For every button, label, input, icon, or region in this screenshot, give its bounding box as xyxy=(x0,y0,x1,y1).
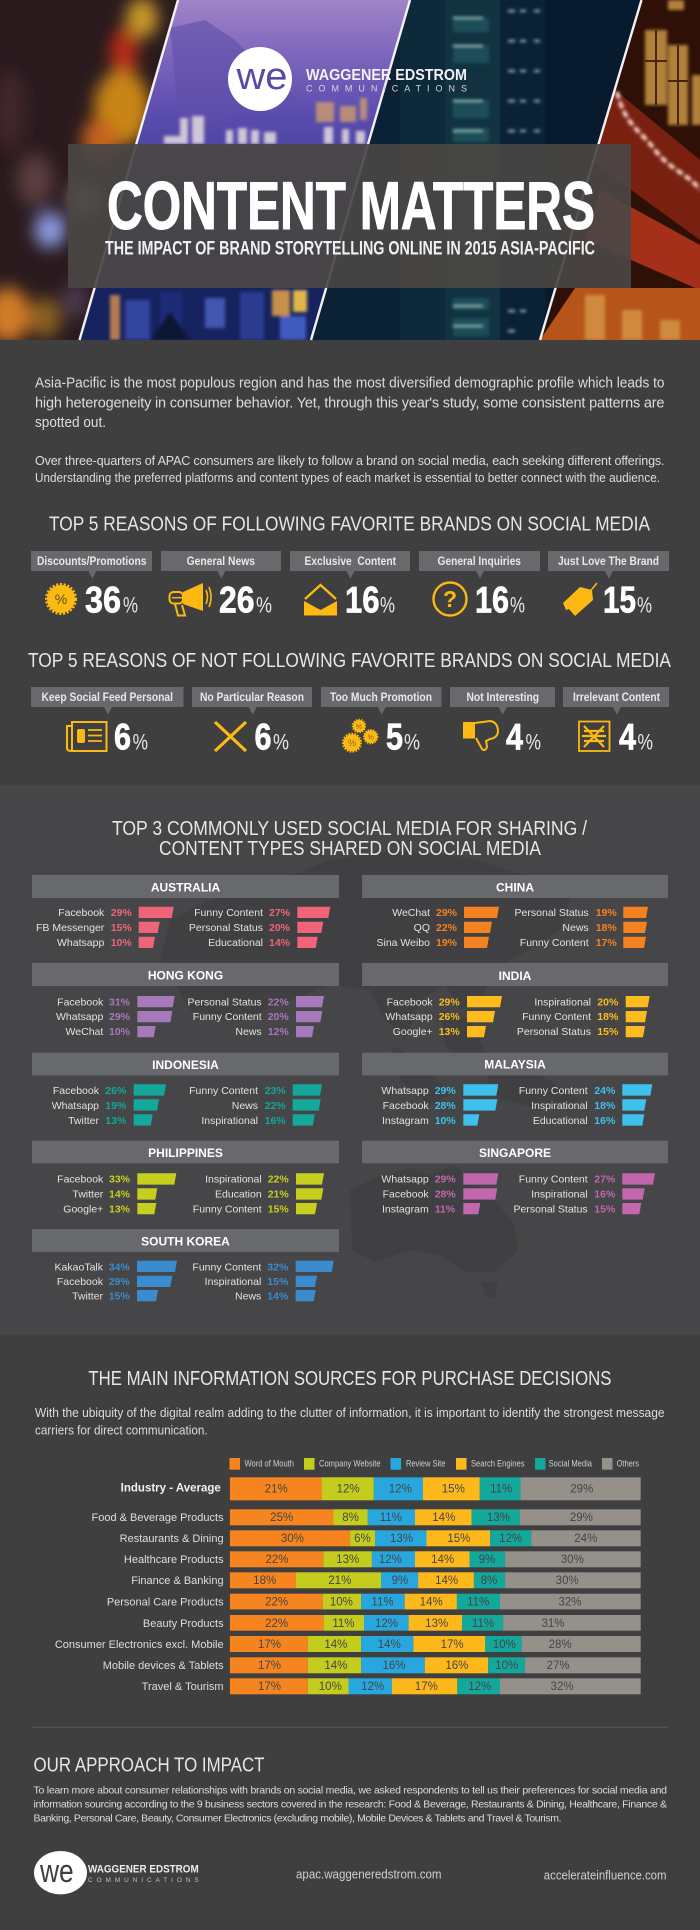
row: personal care: 14% xyxy=(420,1596,443,1608)
reason: irrelevant content xyxy=(563,687,669,757)
row: mobile devices: 16% xyxy=(445,1660,468,1672)
reason: no particular reason: No Particular Reason xyxy=(200,692,304,704)
panel: Hong Kong: 22% xyxy=(268,996,289,1008)
panel: Hong Kong: Personal Status xyxy=(188,996,262,1008)
row: healthcare: 30% xyxy=(561,1554,584,1566)
panel: China: 22% xyxy=(436,922,458,934)
panel: Indonesia: 26% xyxy=(105,1085,127,1097)
row: finance: 8% xyxy=(481,1575,497,1587)
text block: approach: information sourcing according to the 9 business sectors covered in the research: Food & Beverage, Restaurants & Dining, Healthcare, Finance & xyxy=(34,1798,667,1810)
row: healthcare xyxy=(124,1551,641,1567)
text block: information sources intro: carriers for direct communication. xyxy=(35,1422,208,1437)
panel: India: Personal Status xyxy=(517,1026,591,1038)
row: food and beverage: 13% xyxy=(487,1512,510,1524)
reason: just love the brand xyxy=(548,551,669,621)
row: mobile devices xyxy=(103,1657,641,1673)
chart legend xyxy=(230,1458,639,1470)
panel: Singapore: SINGAPORE xyxy=(479,1146,551,1160)
chart legend: Review Site xyxy=(406,1459,445,1470)
panel: India: 20% xyxy=(597,996,619,1008)
reason: exclusive content xyxy=(290,551,410,621)
row: personal care: Personal Care Products xyxy=(107,1596,224,1608)
panel: Malaysia: Educational xyxy=(533,1115,588,1127)
panel: China: Funny Content xyxy=(520,937,589,949)
row: restaurants: 12% xyxy=(499,1533,522,1545)
row: restaurants: 6% xyxy=(354,1533,371,1545)
reason: not interesting: Not Interesting xyxy=(466,692,539,704)
row: consumer electronics: 14% xyxy=(324,1639,347,1651)
panel: Malaysia: Whatsapp xyxy=(381,1085,429,1097)
row: industry average: 29% xyxy=(570,1484,593,1496)
text block: information sources intro: With the ubiquity of the digital realm adding to the clutter of information, it is important to identify the strongest message xyxy=(35,1405,664,1420)
row: travel: 32% xyxy=(551,1681,574,1693)
panel: Hong Kong: WeChat xyxy=(66,1026,103,1038)
panel: Hong Kong: Whatsapp xyxy=(56,1011,103,1023)
panel: Singapore: Personal Status xyxy=(514,1204,588,1216)
row: consumer electronics: 17% xyxy=(258,1639,281,1651)
row: consumer electronics: Consumer Electronics excl. Mobile xyxy=(55,1639,224,1651)
reason: too much promotion: % xyxy=(348,738,356,748)
reason: exclusive content: % xyxy=(380,593,395,618)
intro text block: high heterogeneity in consumer behavior. Yet, through this year's study, some consistent patterns are xyxy=(35,396,664,412)
world map silhouette xyxy=(160,850,580,1298)
intro text block: Asia-Pacific is the most populous region and has the most diversified demographic profile which leads to xyxy=(35,376,664,392)
panel: Australia: Personal Status xyxy=(189,922,263,934)
panel: China: Sina Weibo xyxy=(376,937,430,949)
panel: South Korea: News xyxy=(235,1291,261,1303)
panel: Singapore: Instagram xyxy=(382,1204,429,1216)
panel: India: 15% xyxy=(597,1026,619,1038)
panel: Philippines: 33% xyxy=(109,1174,131,1186)
reason: not interesting: 4 xyxy=(506,716,523,757)
row: finance: 30% xyxy=(556,1575,579,1587)
reason: just love the brand: 15 xyxy=(603,580,636,621)
panel: Singapore: Facebook xyxy=(383,1189,429,1201)
panel: China: 19% xyxy=(596,907,617,919)
panel: Singapore: 11% xyxy=(435,1204,456,1216)
row: finance xyxy=(131,1572,641,1588)
row: beauty: 13% xyxy=(425,1618,448,1630)
panel: China: 17% xyxy=(596,937,617,949)
panel: South Korea: 15% xyxy=(109,1291,130,1303)
heading: social media sharing: TOP 3 COMMONLY USED SOCIAL MEDIA FOR SHARING / xyxy=(112,818,587,840)
reason: exclusive content: 16 xyxy=(345,580,380,621)
panel: Singapore xyxy=(362,1141,668,1216)
reason: discounts: Discounts/Promotions xyxy=(37,556,146,568)
reason: too much promotion: % xyxy=(356,724,362,731)
panel: India: Google+ xyxy=(393,1026,433,1038)
footer logo: WAGGENER EDSTROM xyxy=(88,1864,199,1876)
panel: Australia: Funny Content xyxy=(194,907,263,919)
panel: Philippines: PHILIPPINES xyxy=(148,1146,223,1160)
row: travel: Travel & Tourism xyxy=(142,1681,224,1693)
panel: Singapore: Inspirational xyxy=(531,1189,588,1201)
panel: Philippines: Google+ xyxy=(63,1204,103,1216)
reason: keep feed personal: % xyxy=(133,729,148,754)
reason: keep feed personal: Keep Social Feed Personal xyxy=(42,692,173,704)
row: beauty: 11% xyxy=(332,1618,354,1630)
reason: not interesting xyxy=(450,687,555,757)
intro text block: spotted out. xyxy=(35,415,106,431)
row: personal care: 22% xyxy=(265,1596,288,1608)
panel: India: 26% xyxy=(439,1011,460,1023)
panel: Philippines: 14% xyxy=(109,1189,131,1201)
panel: South Korea: 29% xyxy=(109,1276,130,1288)
panel: South Korea: Inspirational xyxy=(205,1276,261,1288)
reason: discounts: % xyxy=(55,591,67,607)
reason: general news: General News xyxy=(187,556,255,568)
row: healthcare: 13% xyxy=(336,1554,359,1566)
row: beauty: Beauty Products xyxy=(143,1618,224,1630)
panel: India: Facebook xyxy=(387,996,433,1008)
row: mobile devices: Mobile devices & Tablets xyxy=(103,1660,224,1672)
row: finance: 18% xyxy=(253,1575,276,1587)
reason: too much promotion: % xyxy=(404,729,420,754)
panel: China: 18% xyxy=(596,922,617,934)
row: industry average: 12% xyxy=(389,1484,412,1496)
panel: India: INDIA xyxy=(499,969,532,983)
row: finance: 9% xyxy=(392,1575,408,1587)
panel: reasons of not following xyxy=(31,687,669,757)
panel: Australia: FB Messenger xyxy=(36,922,105,934)
panel: Philippines: Funny Content xyxy=(193,1204,262,1216)
panel: Australia: 29% xyxy=(111,907,132,919)
row: personal care xyxy=(107,1594,641,1609)
row: beauty: 11% xyxy=(472,1618,494,1630)
reason: general inquiries: ? xyxy=(443,586,457,612)
panel: India xyxy=(362,963,668,1038)
panel: Australia: 20% xyxy=(269,922,291,934)
row: mobile devices: 16% xyxy=(382,1660,406,1672)
intro text block xyxy=(35,376,664,485)
row: travel xyxy=(142,1678,641,1694)
row: food and beverage: 8% xyxy=(342,1512,359,1524)
panel: South Korea: Facebook xyxy=(57,1276,104,1288)
panel: Philippines: Education xyxy=(215,1189,262,1201)
panel: Malaysia: 18% xyxy=(594,1100,616,1112)
panel background: social media by market xyxy=(0,785,700,1335)
reason: irrelevant content: % xyxy=(638,729,653,754)
row: restaurants: 13% xyxy=(390,1533,413,1545)
reason: general news xyxy=(161,551,281,621)
text block: approach: To learn more about consumer relationships with brands on social media, we asked respondents to tell us their preferences for social media and xyxy=(34,1784,667,1796)
panel: Indonesia: Twitter xyxy=(68,1115,100,1127)
row: restaurants: 30% xyxy=(281,1533,304,1545)
panel: South Korea: 34% xyxy=(109,1261,130,1273)
footer url: accelerate influence: accelerateinfluence.com xyxy=(544,1867,666,1882)
panel: China: 29% xyxy=(436,907,458,919)
panel: Indonesia: 22% xyxy=(265,1100,286,1112)
row: restaurants: Restaurants & Dining xyxy=(120,1533,224,1545)
reason: too much promotion: Too Much Promotion xyxy=(330,692,432,704)
row: healthcare: 22% xyxy=(265,1554,289,1566)
panel: China: CHINA xyxy=(496,880,534,894)
reason: just love the brand: Just Love The Brand xyxy=(558,556,659,568)
hero photo collage xyxy=(0,0,700,343)
text block: approach: Banking, Personal Care, Beauty, Consumer Electronics (excluding mobile), Mobile Devices & Tablets and Travel & Tourism. xyxy=(34,1812,562,1824)
row: beauty: 31% xyxy=(541,1618,565,1630)
footer logo xyxy=(34,1851,199,1894)
reason: keep feed personal xyxy=(31,687,184,757)
panel: Australia: Facebook xyxy=(58,907,105,919)
panel: South Korea xyxy=(32,1229,339,1303)
row: beauty xyxy=(143,1615,641,1631)
panel: Malaysia: 16% xyxy=(594,1115,616,1127)
panel: Philippines: Inspirational xyxy=(205,1174,262,1186)
row: finance: 21% xyxy=(328,1575,351,1587)
panel: Indonesia xyxy=(32,1053,339,1127)
reason: general inquiries: % xyxy=(510,593,525,618)
panel: Philippines: Twitter xyxy=(72,1189,104,1201)
reason: discounts xyxy=(31,551,152,621)
reason: just love the brand: % xyxy=(637,593,652,618)
reason: no particular reason: % xyxy=(273,729,289,754)
panel: Indonesia: 13% xyxy=(105,1115,127,1127)
panel: Australia: 27% xyxy=(269,907,291,919)
panel: Hong Kong: 10% xyxy=(109,1026,131,1038)
panel: Australia xyxy=(32,875,339,949)
panel: Australia: 15% xyxy=(111,922,132,934)
row: industry average: 21% xyxy=(265,1484,288,1496)
stacked bar chart xyxy=(55,1477,641,1694)
footer url: apac: apac.waggeneredstrom.com xyxy=(296,1866,442,1881)
panel: Hong Kong: News xyxy=(235,1026,262,1038)
chart legend: Others xyxy=(617,1459,639,1470)
panel: Australia: AUSTRALIA xyxy=(151,880,220,894)
panel: Philippines: 13% xyxy=(109,1204,131,1216)
panel: South Korea: 15% xyxy=(267,1276,289,1288)
reason: general inquiries: General Inquiries xyxy=(438,556,521,568)
panel: Indonesia: News xyxy=(232,1100,258,1112)
row: mobile devices: 27% xyxy=(547,1660,570,1672)
panel: Philippines xyxy=(32,1141,339,1216)
text block: approach xyxy=(34,1784,667,1824)
reason: general news: % xyxy=(256,593,272,618)
logo: Waggener Edstrom: we xyxy=(235,56,288,98)
row: consumer electronics xyxy=(55,1636,641,1652)
panel: Indonesia: 23% xyxy=(265,1085,286,1097)
panel: Malaysia: Inspirational xyxy=(531,1100,588,1112)
row: personal care: 10% xyxy=(330,1596,353,1608)
panel: Indonesia: INDONESIA xyxy=(152,1058,219,1072)
panel: Malaysia: Facebook xyxy=(383,1100,429,1112)
logo: Waggener Edstrom: WAGGENER EDSTROM xyxy=(306,67,467,84)
title banner xyxy=(68,144,631,288)
heading: our approach: OUR APPROACH TO IMPACT xyxy=(34,1755,264,1777)
intro text block: Understanding the preferred platforms and content types of each market is essential to better connect with the audience. xyxy=(35,471,660,485)
row: healthcare: 14% xyxy=(431,1554,454,1566)
row: restaurants: 15% xyxy=(447,1533,470,1545)
panel: Australia: Educational xyxy=(208,937,263,949)
panel: Philippines: Facebook xyxy=(57,1174,104,1186)
row: travel: 10% xyxy=(319,1681,342,1693)
panel: South Korea: SOUTH KOREA xyxy=(141,1234,230,1248)
chart legend: Word of Mouth xyxy=(244,1459,294,1470)
row: consumer electronics: 14% xyxy=(378,1639,401,1651)
row: industry average: 12% xyxy=(337,1484,360,1496)
row: industry average: 11% xyxy=(490,1484,512,1496)
footer logo: COMMUNICATIONS xyxy=(88,1877,199,1884)
panel: India: Inspirational xyxy=(534,996,591,1008)
panel: Singapore: Funny Content xyxy=(519,1174,588,1186)
panel: Hong Kong: 29% xyxy=(109,1011,131,1023)
panel: Indonesia: Funny Content xyxy=(189,1085,258,1097)
heading: social media sharing xyxy=(112,818,587,860)
reason: discounts: % xyxy=(123,593,138,618)
panel: Hong Kong: Facebook xyxy=(57,996,104,1008)
reason: general inquiries xyxy=(419,551,540,621)
row: consumer electronics: 28% xyxy=(549,1639,572,1651)
panel: India: Funny Content xyxy=(522,1011,591,1023)
panel: Philippines: 22% xyxy=(268,1174,289,1186)
row: industry average: Industry - Average xyxy=(121,1483,221,1495)
panel: Malaysia: MALAYSIA xyxy=(484,1058,546,1072)
reason: no particular reason xyxy=(192,687,312,757)
heading: information sources: THE MAIN INFORMATION SOURCES FOR PURCHASE DECISIONS xyxy=(88,1368,611,1390)
row: consumer electronics: 17% xyxy=(441,1639,464,1651)
reason: not interesting: % xyxy=(526,729,541,754)
text block: information sources intro xyxy=(35,1405,664,1437)
panel: Malaysia: Funny Content xyxy=(519,1085,588,1097)
row: mobile devices: 17% xyxy=(258,1660,281,1672)
panel: China: WeChat xyxy=(392,907,430,919)
panel: Malaysia: Instagram xyxy=(382,1115,429,1127)
row: food and beverage: Food & Beverage Products xyxy=(92,1512,224,1524)
panel: Malaysia: 28% xyxy=(435,1100,456,1112)
row: beauty: 22% xyxy=(265,1618,288,1630)
row: healthcare: 9% xyxy=(479,1554,495,1566)
row: travel: 17% xyxy=(415,1681,438,1693)
reason: general news: 26 xyxy=(219,580,254,621)
panel: South Korea: 14% xyxy=(267,1291,289,1303)
panel: Indonesia: 16% xyxy=(265,1115,286,1127)
logo: Waggener Edstrom: COMMUNICATIONS xyxy=(306,84,467,94)
reason: too much promotion: % xyxy=(368,734,374,742)
panel: South Korea: 32% xyxy=(267,1261,289,1273)
reason: irrelevant content: Irrelevant Content xyxy=(573,692,660,704)
chart legend: Company Website xyxy=(319,1459,381,1470)
row: finance: Finance & Banking xyxy=(131,1575,224,1587)
panel: Singapore: Whatsapp xyxy=(381,1174,429,1186)
panel: Indonesia: Facebook xyxy=(53,1085,100,1097)
row: finance: 14% xyxy=(435,1575,458,1587)
white diagonal dividers xyxy=(80,0,642,340)
row: travel: 12% xyxy=(361,1681,384,1693)
panel: Malaysia: 10% xyxy=(435,1115,456,1127)
reason: keep feed personal: 6 xyxy=(114,716,131,757)
row: consumer electronics: 10% xyxy=(493,1639,516,1651)
panel: Hong Kong: Funny Content xyxy=(193,1011,262,1023)
row: mobile devices: 14% xyxy=(324,1660,347,1672)
panel: Malaysia: 24% xyxy=(594,1085,616,1097)
panel: Singapore: 27% xyxy=(594,1174,616,1186)
panel: Singapore: 16% xyxy=(594,1189,616,1201)
footer logo: we xyxy=(39,1853,74,1889)
panel: Singapore: 28% xyxy=(435,1189,456,1201)
panel: India: 29% xyxy=(439,996,460,1008)
reason: no particular reason: 6 xyxy=(254,716,272,757)
row: healthcare: Healthcare Products xyxy=(124,1554,224,1566)
row: travel: 12% xyxy=(468,1681,491,1693)
heading: social media sharing: CONTENT TYPES SHARED ON SOCIAL MEDIA xyxy=(159,838,542,860)
panel: China: 19% xyxy=(436,937,458,949)
logo: Waggener Edstrom xyxy=(228,47,467,111)
panel: South Korea: Funny Content xyxy=(192,1261,261,1273)
reason: too much promotion xyxy=(321,687,442,757)
panel: Australia: Whatsapp xyxy=(57,937,104,949)
row: food and beverage: 25% xyxy=(270,1512,293,1524)
panel: Indonesia: 19% xyxy=(105,1100,127,1112)
row: personal care: 11% xyxy=(467,1596,489,1608)
panel: Singapore: 15% xyxy=(594,1204,616,1216)
panel: Australia: 14% xyxy=(269,937,291,949)
row: beauty: 12% xyxy=(375,1618,398,1630)
panel: India: Whatsapp xyxy=(385,1011,433,1023)
row: mobile devices: 10% xyxy=(495,1660,518,1672)
reason: exclusive content: Exclusive Content xyxy=(304,556,396,568)
panel: Hong Kong: 20% xyxy=(268,1011,289,1023)
row: food and beverage: 11% xyxy=(380,1512,402,1524)
row: restaurants: 24% xyxy=(574,1533,597,1545)
panel: South Korea: Twitter xyxy=(72,1291,104,1303)
intro text block: Over three-quarters of APAC consumers are likely to follow a brand on social media, each seeking different offerings. xyxy=(35,454,664,468)
row: personal care: 32% xyxy=(558,1596,582,1608)
row: travel: 17% xyxy=(258,1681,281,1693)
panel: India: 13% xyxy=(439,1026,460,1038)
panel: Indonesia: Whatsapp xyxy=(52,1100,99,1112)
row: food and beverage: 14% xyxy=(432,1512,455,1524)
row: industry average: 15% xyxy=(442,1484,465,1496)
panel: Singapore: 29% xyxy=(435,1174,456,1186)
panel: Hong Kong xyxy=(32,963,339,1038)
panel: Philippines: 15% xyxy=(268,1204,289,1216)
panel: Hong Kong: 31% xyxy=(109,996,131,1008)
row: food and beverage: 29% xyxy=(570,1512,593,1524)
panel: China: News xyxy=(562,922,589,934)
panel: reasons of following xyxy=(31,551,669,621)
reason: too much promotion: 5 xyxy=(386,716,403,757)
panel: Malaysia: 29% xyxy=(435,1085,456,1097)
panel: China xyxy=(362,875,668,949)
panel: Indonesia: Inspirational xyxy=(201,1115,258,1127)
reason: irrelevant content: 4 xyxy=(619,716,636,757)
reason: discounts: 36 xyxy=(85,580,121,621)
reason: general inquiries: 16 xyxy=(475,580,509,621)
panel: China: QQ xyxy=(414,922,430,934)
row: food and beverage xyxy=(92,1509,641,1525)
row: healthcare: 12% xyxy=(379,1554,402,1566)
panel: India: 18% xyxy=(597,1011,619,1023)
panel: Hong Kong: 12% xyxy=(268,1026,289,1038)
row: personal care: 11% xyxy=(371,1596,394,1608)
panel: South Korea: KakaoTalk xyxy=(55,1261,104,1273)
row: restaurants xyxy=(120,1530,641,1546)
row: industry average xyxy=(121,1477,641,1500)
chart legend: Social Media xyxy=(549,1459,593,1470)
panel: Australia: 10% xyxy=(111,937,132,949)
panel: Malaysia xyxy=(362,1053,668,1127)
panel: China: Personal Status xyxy=(515,907,589,919)
chart legend: Search Engines xyxy=(471,1459,525,1470)
panel: Hong Kong: HONG KONG xyxy=(148,968,223,982)
panel: Philippines: 21% xyxy=(268,1189,289,1201)
